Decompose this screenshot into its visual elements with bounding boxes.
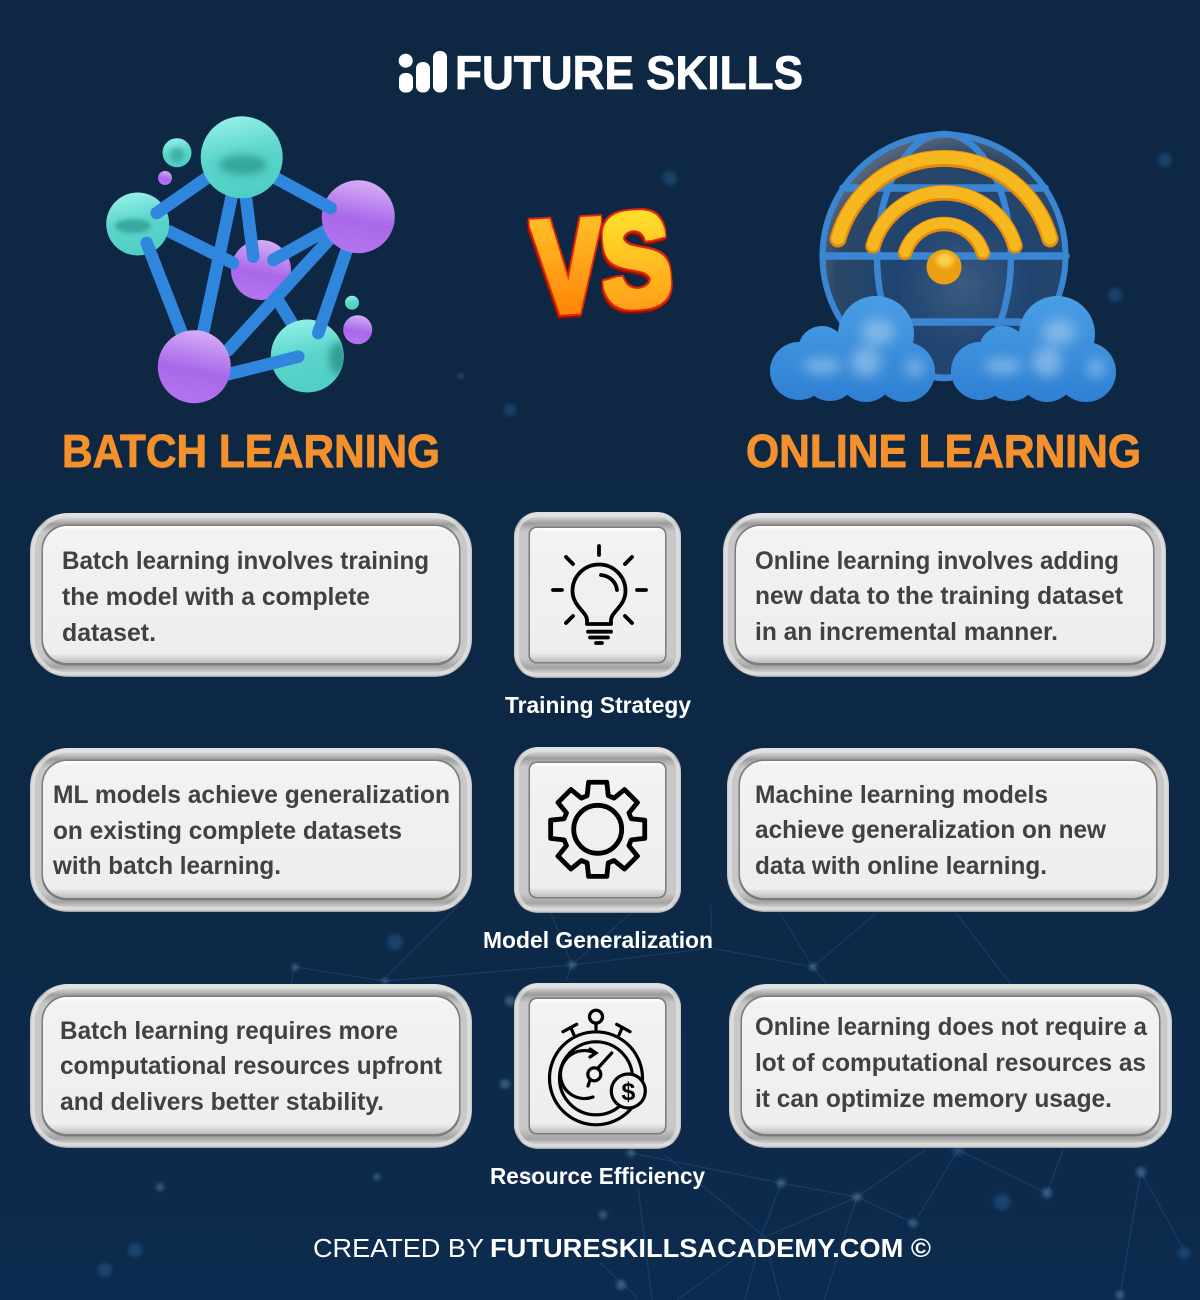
label: Training Strategy: Training Strategy: [505, 692, 691, 718]
panel: batch generalization: ML models achieve generalization: [53, 781, 450, 809]
left cloud: [770, 296, 935, 402]
logo: Future Skills: [399, 46, 803, 99]
icon: light bulb: [553, 546, 646, 643]
logo wordmark: FUTURE SKILLS: [455, 46, 803, 99]
panel: batch training strategy: the model with a complete: [62, 583, 370, 611]
right cloud: [951, 296, 1116, 402]
panel: online resources: it can optimize memory usage.: [755, 1085, 1112, 1113]
icon: logo bars: [399, 51, 447, 92]
footer credit: FUTURESKILLSACADEMY.COM ©: [490, 1233, 931, 1263]
panel: batch resources: [30, 984, 472, 1148]
panel: batch training strategy: Batch learning involves training: [62, 547, 429, 575]
panel: online training strategy: new data to the training dataset: [755, 582, 1124, 610]
panel: training strategy icon tile: [514, 512, 681, 678]
VS badge: [530, 185, 677, 341]
icon: globe with wifi and clouds: [770, 134, 1116, 402]
label: Resource Efficiency: Resource Efficiency: [490, 1163, 705, 1189]
panel: online training strategy: in an incremental manner.: [755, 618, 1058, 646]
label: Model Generalization: Model Generalization: [483, 927, 713, 953]
footer credit: [313, 1233, 931, 1263]
panel: online training strategy: [723, 513, 1166, 677]
panel: online generalization: achieve generalization on new: [755, 816, 1107, 844]
heading: Batch Learning: BATCH LEARNING: [62, 425, 440, 477]
panel: batch generalization: with batch learning.: [52, 852, 281, 880]
panel: online resources: [729, 984, 1172, 1148]
icon: stopwatch with dollar: [550, 1010, 645, 1125]
panel: online generalization: Machine learning models: [755, 781, 1048, 809]
panel: batch training strategy: [30, 513, 472, 677]
panel: batch resources: Batch learning requires more: [60, 1017, 398, 1045]
panel: batch generalization: [30, 748, 472, 912]
panel: online generalization: data with online learning.: [755, 852, 1047, 880]
footer credit: CREATED BY: [313, 1233, 484, 1263]
panel: batch training strategy: dataset.: [62, 619, 156, 647]
panel: batch resources: computational resources upfront: [60, 1052, 443, 1080]
panel: batch resources: and delivers better stability.: [60, 1088, 384, 1116]
panel: online training strategy: Online learning involves adding: [755, 547, 1119, 575]
panel: online resources: lot of computational resources as: [755, 1049, 1146, 1077]
panel: batch generalization: on existing complete datasets: [53, 817, 402, 845]
panel: model generalization icon tile: [514, 747, 681, 913]
VS badge: S: [595, 185, 677, 337]
panel: online generalization: [727, 748, 1169, 912]
icon: molecule network: [106, 116, 395, 403]
icon: gear: [551, 782, 645, 876]
panel: online resources: Online learning does not require a: [755, 1013, 1148, 1041]
panel: resource efficiency icon tile: [514, 983, 681, 1149]
VS badge: V: [530, 191, 605, 341]
heading: Online Learning: ONLINE LEARNING: [746, 425, 1141, 477]
dollar sign: $: [621, 1078, 635, 1106]
